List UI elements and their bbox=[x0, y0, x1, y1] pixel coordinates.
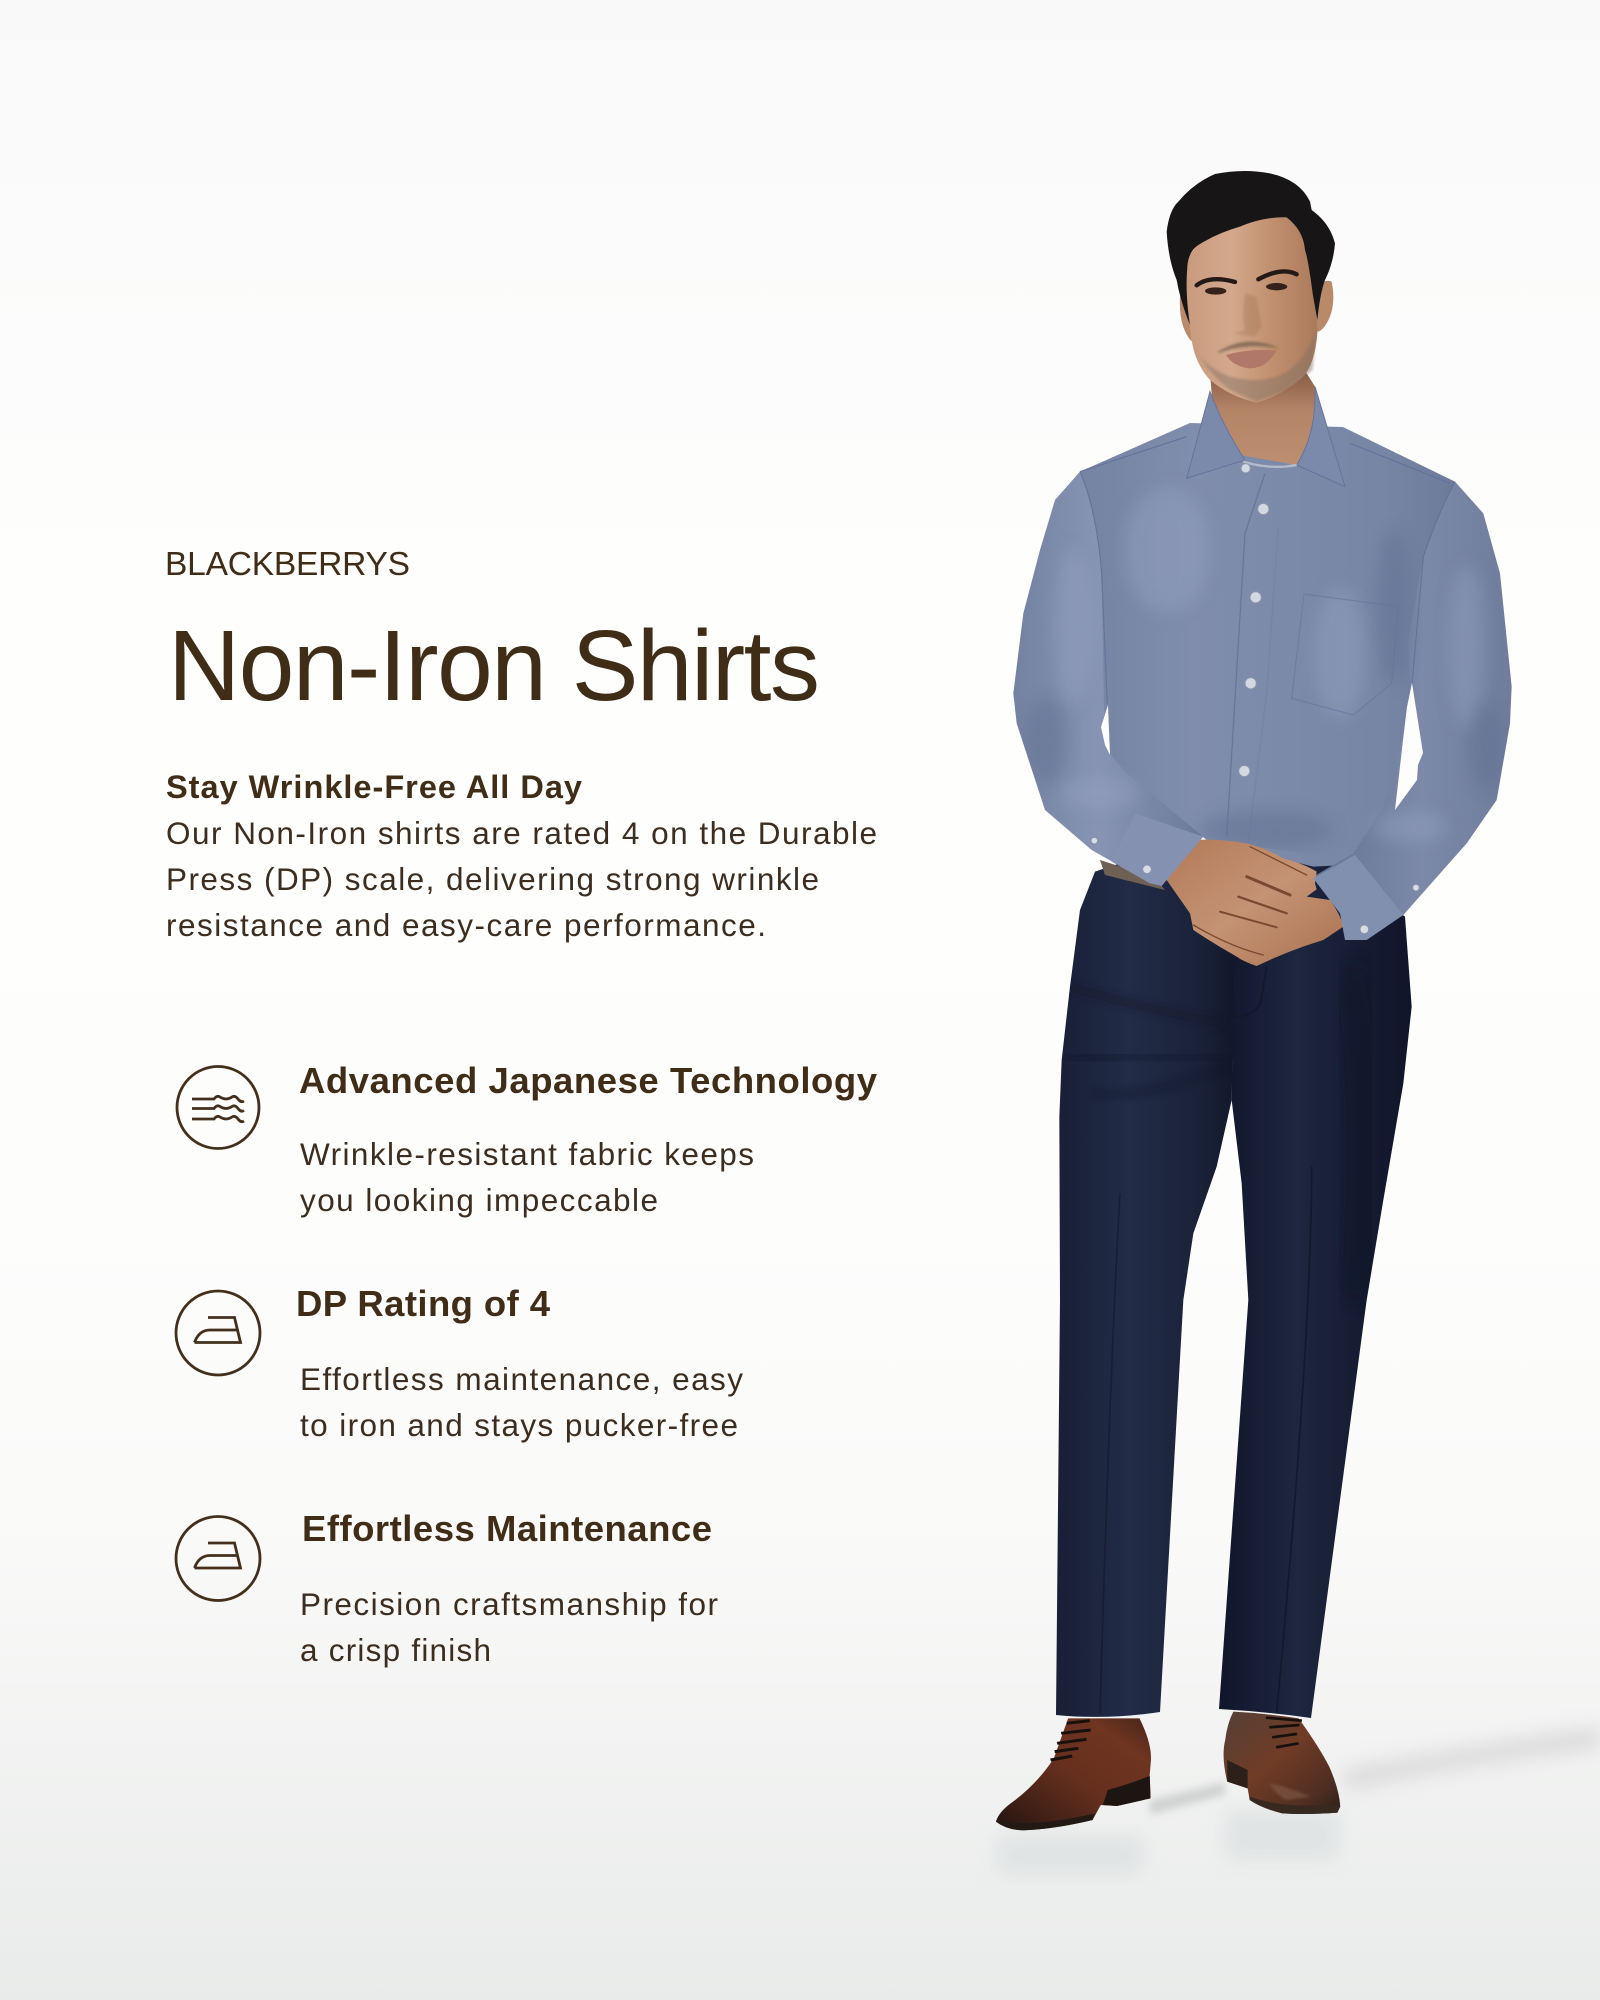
icon: iron bbox=[176, 1516, 260, 1600]
hands and cuffs bbox=[1091, 813, 1419, 966]
feature: Effortless Maintenance bbox=[176, 1508, 718, 1668]
icon: fabric waves bbox=[177, 1066, 259, 1148]
hair bbox=[1167, 171, 1335, 325]
shirt seams, placket and pocket bbox=[1080, 437, 1455, 843]
feature description: Wrinkle-resistant fabric keeps bbox=[300, 1136, 754, 1172]
figure: man in blue shirt and navy trousers bbox=[996, 171, 1512, 1830]
brand name: BLACKBERRYS bbox=[165, 546, 410, 583]
feature heading: Effortless Maintenance bbox=[302, 1508, 712, 1549]
collar bbox=[1187, 387, 1345, 487]
shirt body bbox=[1080, 423, 1455, 867]
lips bbox=[1226, 350, 1277, 368]
feature description bbox=[300, 1136, 754, 1218]
eyebrows bbox=[1197, 271, 1297, 285]
eyes bbox=[1205, 283, 1287, 295]
intro text block bbox=[166, 769, 877, 943]
intro text block: Our Non-Iron shirts are rated 4 on the Durable bbox=[166, 815, 877, 851]
feature: DP Rating of 4 bbox=[176, 1283, 743, 1443]
shirt bbox=[1013, 423, 1512, 937]
feature description bbox=[300, 1361, 743, 1443]
title: Non-Iron Shirts bbox=[168, 610, 820, 722]
feature description: Precision craftsmanship for bbox=[300, 1586, 718, 1622]
nose shadow bbox=[1233, 293, 1262, 337]
face bbox=[1185, 212, 1317, 403]
moustache bbox=[1218, 342, 1280, 353]
feature description: to iron and stays pucker-free bbox=[300, 1407, 738, 1443]
shoes bbox=[996, 1712, 1340, 1830]
clasped hands bbox=[1167, 840, 1343, 966]
feature heading: DP Rating of 4 bbox=[296, 1283, 551, 1324]
ears bbox=[1180, 281, 1333, 342]
belt bbox=[1100, 860, 1165, 890]
intro text block: Stay Wrinkle-Free All Day bbox=[166, 769, 582, 805]
stubble bbox=[1194, 330, 1316, 402]
right cuff bbox=[1313, 855, 1403, 940]
feature description bbox=[300, 1586, 718, 1668]
left sleeve bbox=[1013, 472, 1203, 883]
left cuff bbox=[1112, 813, 1203, 886]
feature heading: Advanced Japanese Technology bbox=[299, 1060, 878, 1101]
intro text block: Press (DP) scale, delivering strong wrinkle bbox=[166, 861, 819, 897]
trouser shading bbox=[1067, 963, 1365, 1713]
trousers bbox=[1056, 850, 1412, 1718]
gaps between arms and torso bbox=[1101, 683, 1423, 810]
feature description: Effortless maintenance, easy bbox=[300, 1361, 743, 1397]
right sleeve bbox=[1313, 482, 1512, 937]
feature: Advanced Japanese Technology bbox=[177, 1060, 878, 1218]
cuff buttons bbox=[1091, 837, 1419, 934]
shirt shading bbox=[1027, 487, 1503, 850]
feature description: a crisp finish bbox=[300, 1632, 491, 1668]
collar button bbox=[1241, 464, 1250, 473]
neck bbox=[1210, 373, 1315, 465]
icon: iron bbox=[176, 1291, 260, 1375]
shirt buttons bbox=[1239, 503, 1269, 777]
intro text block: resistance and easy-care performance. bbox=[166, 907, 766, 943]
feature description: you looking impeccable bbox=[300, 1182, 658, 1218]
head bbox=[1167, 171, 1345, 487]
